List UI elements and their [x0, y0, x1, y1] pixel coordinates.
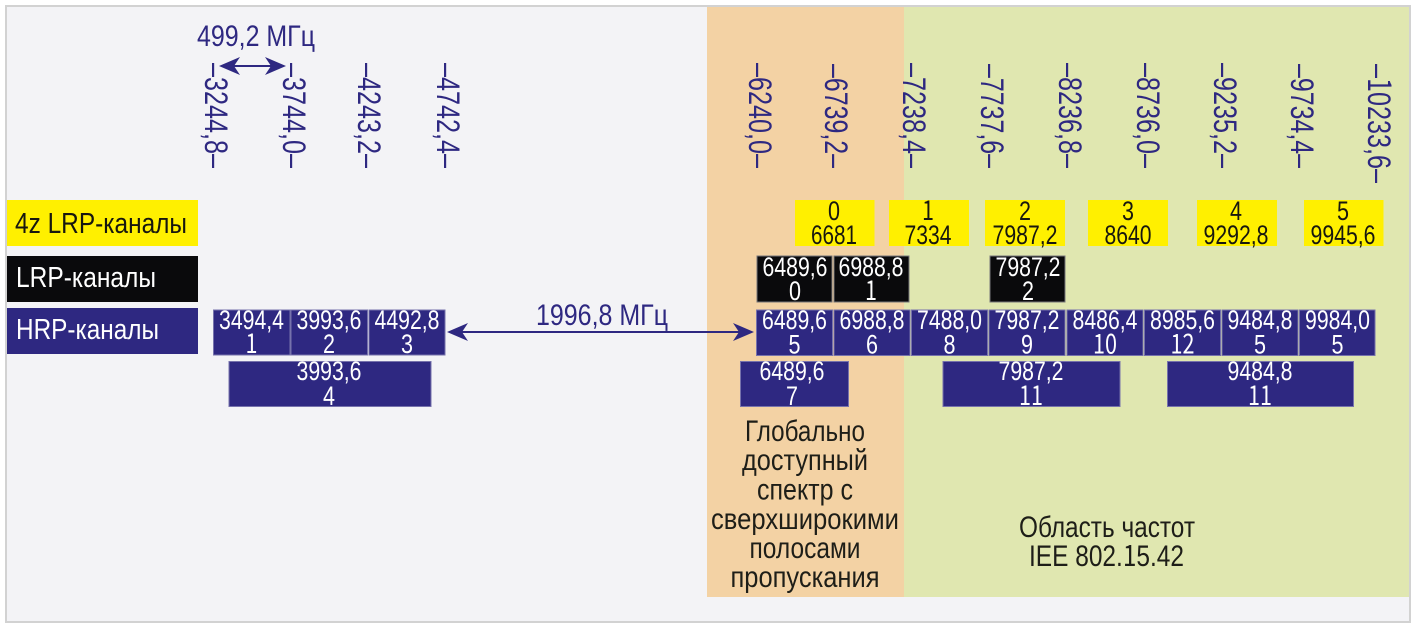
- HRP channels: high band row: 5: [1254, 330, 1266, 360]
- HRP channel 7: 6489,6: [760, 356, 824, 386]
- HRP channels: high band row: 12: [1170, 322, 1194, 362]
- 4z LRP channels: 3: [1122, 196, 1134, 226]
- HRP channels: high band row: 9984,0: [1305, 305, 1370, 335]
- frequency ticks: high band: –7737,6–: [974, 64, 1010, 168]
- HRP channels: high band row: 5: [788, 330, 800, 360]
- HRP channels: low band row: 3494,4: [219, 305, 284, 335]
- frequency ticks: high band: –8736,0–: [1130, 63, 1166, 168]
- frequency ticks: high band: –10233,6–: [1358, 64, 1404, 183]
- HRP channel 11 (7987,2): [943, 356, 1120, 413]
- HRP channel 4: 3993,6: [296, 356, 362, 386]
- 4z LRP channels: 0: [828, 196, 840, 226]
- caption: globally available UWB spectrum: [711, 415, 899, 594]
- frequency ticks: low band: –3744,0–: [276, 63, 312, 168]
- caption: IEE frequency region: IEE 802.15.42: [1029, 533, 1184, 575]
- HRP channels: high band row: 5: [1332, 330, 1344, 360]
- HRP channel 11 (9484,8): 11: [1248, 374, 1272, 413]
- HRP channel 11 (7987,2): 11: [1019, 374, 1043, 413]
- frequency ticks: high band: –9734,4–: [1284, 64, 1320, 168]
- caption: globally available UWB spectrum: доступный: [742, 444, 868, 477]
- arrow: 1996.8 MHz gap: [447, 323, 754, 341]
- LRP channels: 6988,8: [838, 252, 904, 282]
- HRP channels: low band row: 4492,8: [374, 305, 440, 335]
- 4z LRP channels: 1: [922, 189, 934, 228]
- LRP channels: 1: [865, 269, 877, 308]
- LRP channels: [757, 252, 1065, 308]
- HRP channels: high band row: 8985,6: [1150, 305, 1215, 335]
- frequency ticks: low band: –4243,2–: [351, 63, 387, 168]
- LRP channels: 0: [789, 276, 801, 306]
- frequency ticks: low band: –3244,8–: [198, 63, 234, 168]
- caption: globally available UWB spectrum: Глобально: [745, 415, 865, 448]
- panel: IEEE frequency region: [904, 7, 1409, 597]
- frequency ticks: high band: –9235,2–: [1207, 63, 1243, 168]
- HRP channel 7: [740, 356, 848, 411]
- caption: IEE frequency region: Область частот: [1019, 511, 1195, 544]
- legend: LRP channels: [7, 256, 198, 302]
- frequency ticks: high band: –7238,4–: [896, 63, 932, 168]
- legend: LRP channels: LRP-каналы: [16, 262, 156, 294]
- panel: globally available spectrum band: [707, 7, 904, 597]
- HRP channels: low band row: 3: [401, 329, 413, 359]
- HRP channel 11 (9484,8): [1168, 356, 1354, 413]
- legend: HRP channels: [7, 308, 198, 354]
- HRP channels: high band row: 7987,2: [994, 305, 1060, 335]
- HRP channels: low band row: 2: [323, 329, 335, 359]
- LRP channels: 7987,2: [996, 252, 1060, 282]
- label: 1996.8 MHz gap: 1996,8 МГц: [536, 299, 668, 332]
- caption: globally available UWB spectrum: полосами: [750, 532, 860, 565]
- frequency ticks: low band: [198, 63, 466, 168]
- HRP channel 4: [229, 356, 431, 411]
- LRP channels: 6489,6: [762, 252, 828, 282]
- HRP channels: high band row: 6489,6: [762, 305, 827, 335]
- frequency ticks: high band: –8236,8–: [1052, 63, 1088, 168]
- HRP channel 11 (9484,8): 9484,8: [1228, 356, 1292, 386]
- 4z LRP channels: [795, 189, 1384, 250]
- 4z LRP channels: 2: [1019, 196, 1031, 226]
- 4z LRP channels: 9945,6: [1310, 220, 1376, 250]
- HRP channels: low band row: 1: [246, 322, 258, 361]
- HRP channels: high band row: 8486,4: [1072, 305, 1138, 335]
- 4z LRP channels: 7334: [904, 220, 952, 250]
- caption: globally available UWB spectrum: пропускания: [730, 561, 880, 594]
- HRP channel 11 (7987,2): 7987,2: [998, 356, 1064, 386]
- legend: 4z LRP channels: 4z LRP-каналы: [15, 208, 187, 240]
- HRP channels: high band row: [756, 305, 1375, 362]
- HRP channels: low band row: [214, 305, 445, 361]
- legend: HRP channels: HRP-каналы: [16, 314, 159, 346]
- 4z LRP channels: 5: [1337, 196, 1349, 226]
- HRP channels: high band row: 6988,8: [840, 305, 904, 335]
- HRP channels: high band row: 9: [1021, 330, 1033, 360]
- LRP channels: 2: [1022, 276, 1034, 306]
- HRP channels: high band row: 6: [866, 330, 878, 360]
- HRP channels: high band row: 10: [1093, 322, 1117, 362]
- legend: 4z LRP channels: [7, 200, 198, 246]
- 4z LRP channels: 8640: [1104, 220, 1152, 250]
- frequency ticks: high band: –6240,0–: [742, 63, 778, 168]
- frequency ticks: high band: [742, 63, 1404, 183]
- 4z LRP channels: 4: [1230, 196, 1242, 226]
- caption: globally available UWB spectrum: спектр с: [757, 474, 853, 506]
- HRP channels: high band row: 7488,0: [917, 305, 982, 335]
- 4z LRP channels: 6681: [811, 220, 857, 250]
- HRP channel 7: 7: [786, 381, 798, 411]
- HRP channels: high band row: 8: [944, 330, 956, 360]
- label: 499.2 MHz spacing: 499,2 МГц: [197, 20, 315, 53]
- caption: IEE frequency region: [1019, 511, 1195, 575]
- 4z LRP channels: 9292,8: [1204, 220, 1268, 250]
- HRP channels: low band row: 3993,6: [296, 305, 362, 335]
- HRP channels: high band row: 9484,8: [1228, 305, 1292, 335]
- caption: globally available UWB spectrum: сверхширокими: [711, 503, 899, 536]
- HRP channel 4: 4: [323, 381, 335, 411]
- frequency ticks: low band: –4742,4–: [430, 63, 466, 168]
- frequency ticks: high band: –6739,2–: [818, 64, 854, 168]
- arrow: 499.2 MHz spacing: [219, 57, 286, 75]
- 4z LRP channels: 7987,2: [992, 220, 1058, 250]
